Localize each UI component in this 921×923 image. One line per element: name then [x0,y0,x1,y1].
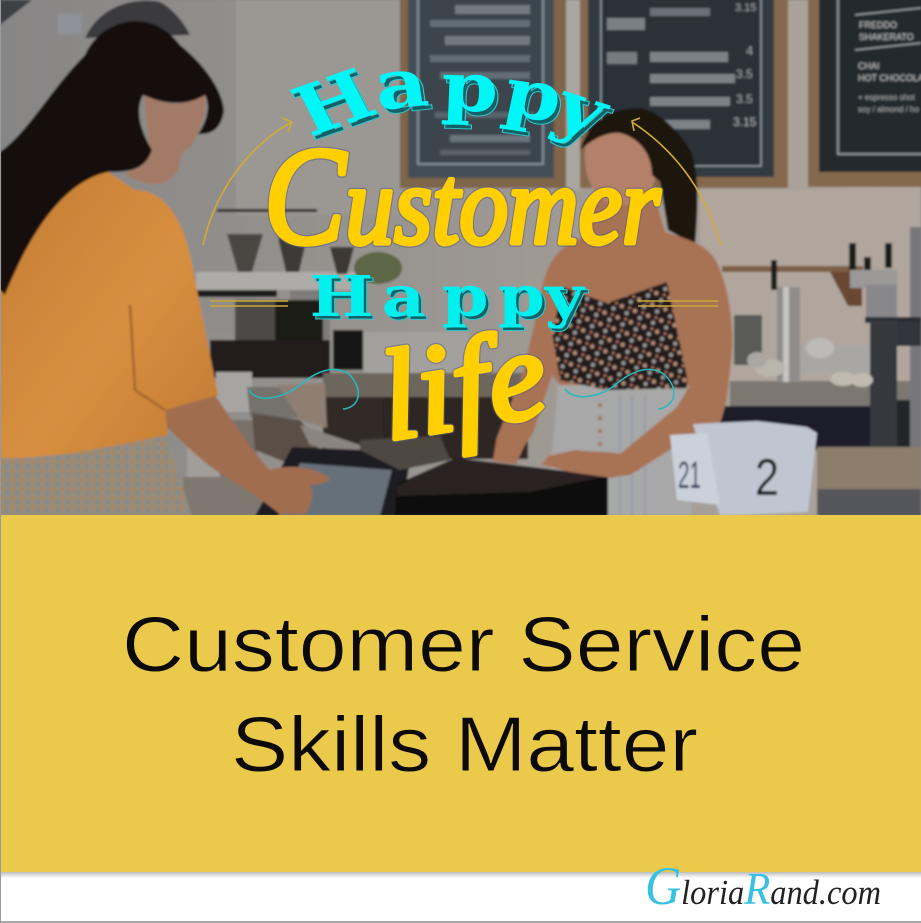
face [585,126,656,206]
hair [0,21,224,295]
double rule left [210,301,288,306]
icon: swirl right [565,369,674,409]
chalkboard middle: 3.5 [736,67,753,81]
chalkboard right: + espresso shot [858,93,915,102]
woman left [0,1,330,516]
chalkboard right: soy / almond / ho [858,105,919,114]
heading: life: life [370,302,555,468]
heading: Happy second line: Happy [313,266,589,333]
title [122,600,805,788]
heading: life: life [370,302,555,468]
stand [865,317,921,323]
chalkboard right: FREDDO [859,20,897,30]
cups [734,315,762,365]
panel: footer [0,872,921,923]
logo: GloriaRand.com: GloriaRand.com [645,856,881,916]
counter [395,458,608,516]
chalkboard left [400,0,566,188]
tablet [255,436,450,516]
heading: Customer: Customer [264,119,660,274]
skirt [0,432,192,516]
wall [0,0,921,516]
heading: Happy arched: Happy [279,41,624,154]
sweater [0,170,218,458]
floral top [552,282,687,390]
chalkboard middle: 3.15 [735,2,756,14]
heading: Happy arched: Happy [282,45,627,158]
woman right [493,108,732,516]
chalkboard right: CHAI [858,61,880,71]
chalkboard right: SHAKERATO [859,32,914,42]
chalkboard middle: 4 [746,43,753,58]
title: Customer Service [122,600,805,688]
hands on counter [493,437,640,478]
heading: Happy second line: Happy [310,263,586,330]
heading: Customer: Customer [264,119,660,274]
icon: curved arrow left [203,118,292,245]
chalkboard middle: 3.15 [733,115,757,129]
chalkboard right [808,0,921,187]
face [125,92,206,184]
number cards: 21 [678,455,701,497]
number cards: 2 [755,449,779,507]
coffee machines [183,209,528,516]
number cards [670,421,817,516]
title: Skills Matter [231,700,698,788]
arm and hand [165,395,330,514]
taps [777,287,800,382]
chalkboard middle: 3.5 [736,92,753,106]
body and arms [493,180,732,477]
page edge [0,0,1,923]
icon: swirl left [249,369,358,409]
icon: curved arrow right [632,118,721,245]
panel: yellow title band [0,515,921,872]
chalkboard middle [580,0,788,188]
lower bar [817,447,921,490]
right shelf and bar [720,227,921,516]
panel: cafe photo [0,0,921,516]
hat shape behind hair [85,1,190,38]
double rule right [638,301,718,306]
ponytail [630,108,697,245]
skirt [547,383,692,516]
